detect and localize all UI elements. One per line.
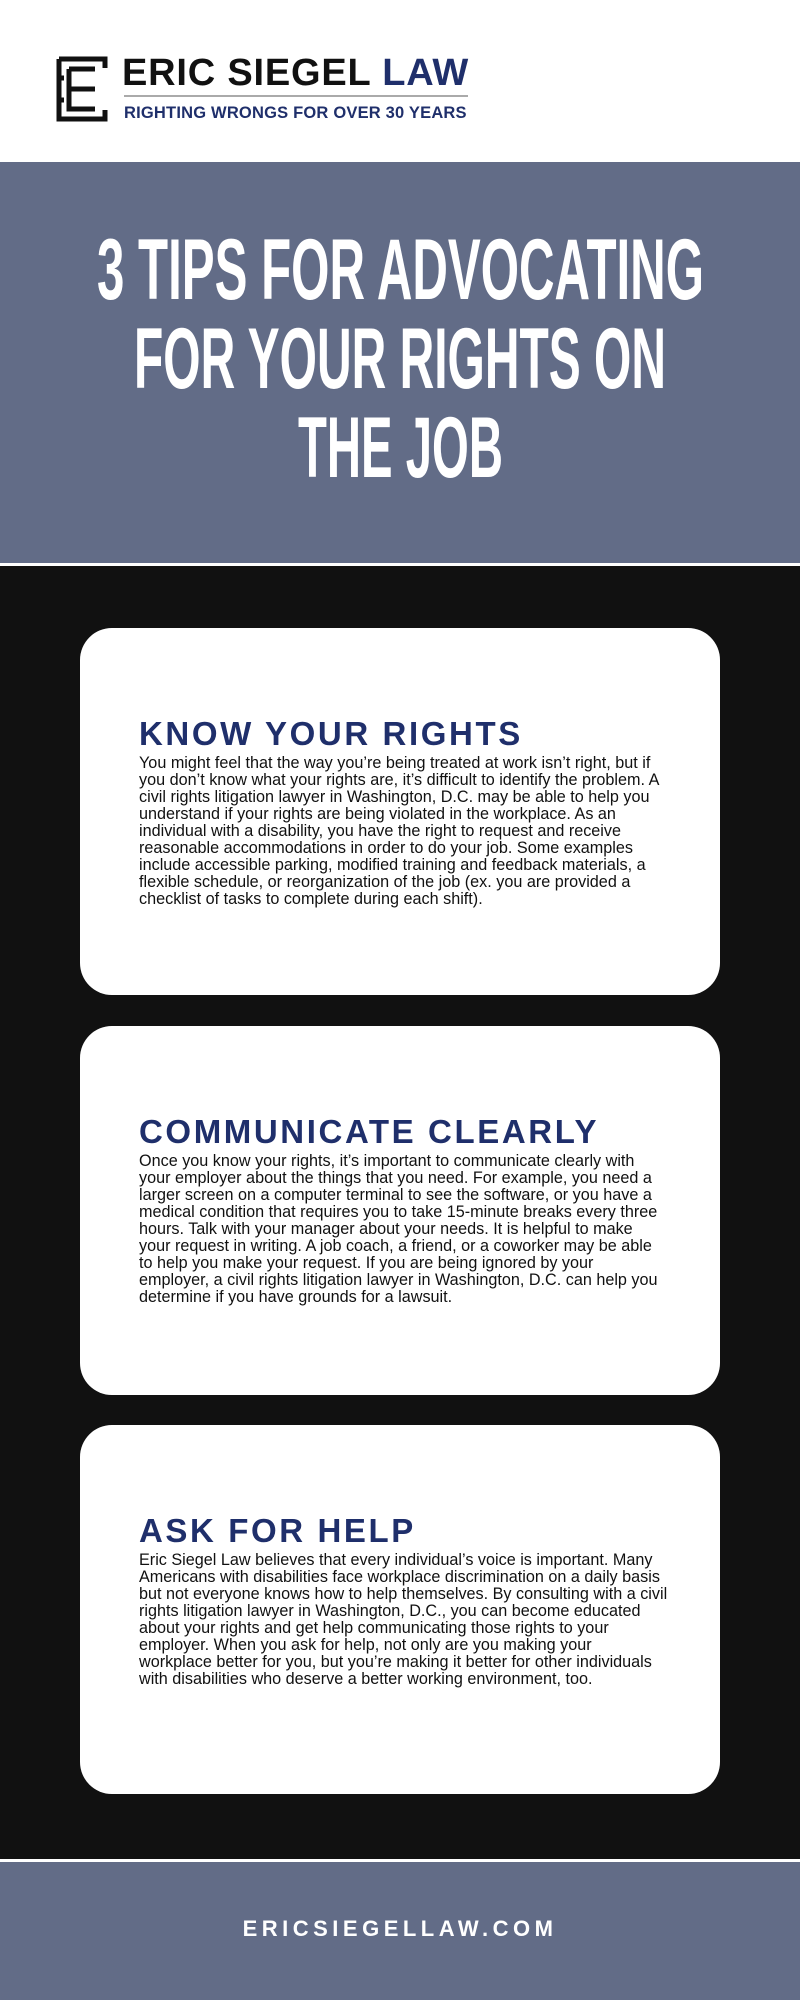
text: know your rights: You might feel that the way you’re being treated at work isn’t right, but if [139,754,650,772]
text: communicate clearly [139,1152,658,1306]
text: know your rights: understand if your rights are being violated in the workplace. As an [139,805,616,823]
text: know your rights: individual with a disability, you have the right to request and receive [139,822,621,840]
text: know your rights: checklist of tasks to complete during each shift). [139,890,483,908]
text: ask for help: workplace better for you, but you’re making it better for other individuals [139,1653,652,1671]
text: communicate clearly: hours. Talk with your manager about your needs. It is helpful to make [139,1220,633,1238]
logo tagline: RIGHTING WRONGS FOR OVER 30 YEARS [124,104,467,122]
text: know your rights: civil rights litigation lawyer in Washington, D.C. may be able to help you [139,788,649,806]
header [0,0,800,162]
text: know your rights: you don’t know what your rights are, it’s difficult to identify the problem. A [139,771,659,789]
text: communicate clearly: Once you know your rights, it’s important to communicate clearly with [139,1152,634,1170]
title: THE JOB [298,400,503,496]
text: communicate clearly: employer, a civil rights litigation lawyer in Washington, D.C. can help you [139,1271,658,1289]
text: ask for help: rights litigation lawyer in Washington, D.C., you can become educated [139,1602,640,1620]
footer url: ERICSIEGELLAW.COM [243,1916,557,1941]
text: communicate clearly: determine if you have grounds for a lawsuit. [139,1288,452,1306]
text: ask for help: with disabilities who deserve a better working environment, too. [139,1670,592,1688]
title [97,222,704,496]
heading: ask for help: ASK FOR HELP [139,1512,416,1549]
text: communicate clearly: to help you make your request. If you are being ignored by your [139,1254,593,1272]
text: communicate clearly: your employer about the things that you need. For example, you need a [139,1169,652,1187]
panel: know your rights [80,628,720,995]
text: ask for help: Americans with disabilities face workplace discrimination on a daily basis [139,1568,660,1586]
logo [56,52,469,122]
text: ask for help: employer. When you ask for help, not only are you making your [139,1636,592,1654]
text: ask for help: about your rights and get help communicating those rights to your [139,1619,609,1637]
text: communicate clearly: your request in writing. A job coach, a friend, or a coworker may be able [139,1237,652,1255]
text: communicate clearly: medical condition that requires you to take 15-minute breaks every three [139,1203,657,1221]
heading: know your rights: KNOW YOUR RIGHTS [139,715,523,752]
text: know your rights [139,754,660,908]
text: communicate clearly: larger screen on a computer terminal to see the software, or you have a [139,1186,652,1204]
text: ask for help [139,1551,667,1688]
heading: communicate clearly: COMMUNICATE CLEARLY [139,1113,599,1150]
footer [0,1862,800,2000]
text: ask for help: Eric Siegel Law believes that every individual’s voice is important. Many [139,1551,652,1569]
title banner [0,162,800,563]
panel: communicate clearly [80,1026,720,1395]
text: know your rights: reasonable accommodations in order to do your job. Some examples [139,839,633,857]
logo name: ERIC SIEGEL LAW [122,52,469,94]
icon: logo mark [56,56,108,122]
text: ask for help: but not everyone knows how to help themselves. By consulting with a civil [139,1585,667,1603]
text: know your rights: include accessible parking, modified training and feedback materials, a [139,856,646,874]
panel: ask for help [80,1425,720,1794]
text: know your rights: flexible schedule, or reorganization of the job (ex. you are provided a [139,873,630,891]
